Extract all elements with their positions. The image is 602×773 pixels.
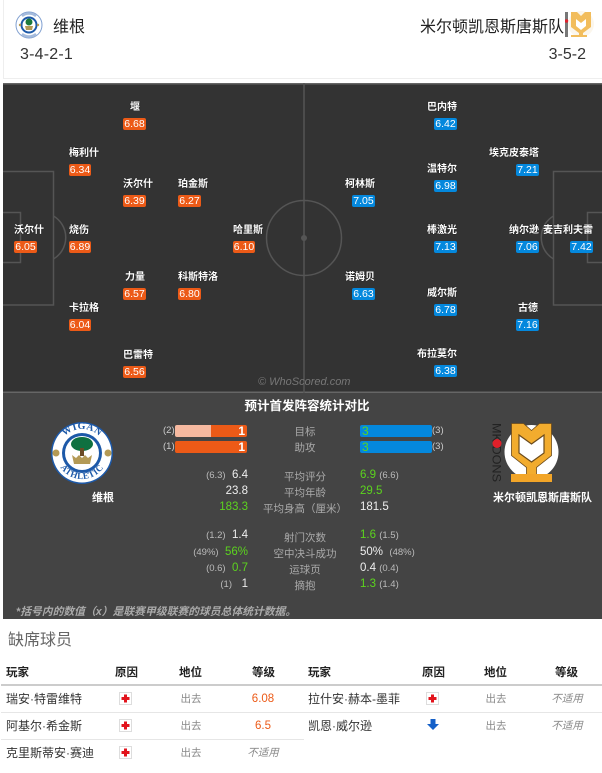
- away player: 古德: 7.16: [517, 319, 538, 331]
- home player: 珀金斯: 6.27: [179, 195, 200, 207]
- row: 凯恩·威尔逊: 不适用: [551, 720, 583, 732]
- away player: 温特尔: [427, 163, 457, 192]
- home player: 科斯特洛: 科斯特洛: [178, 272, 218, 283]
- row: 克里斯蒂安·赛迪: 不适用: [247, 747, 279, 759]
- home player: 巴雷特: 巴雷特: [123, 350, 153, 361]
- home player: 科斯特洛: [178, 271, 218, 300]
- bar: assists away: 3: [362, 440, 369, 454]
- home player: 沃尔什 goalkeeper: [14, 224, 44, 253]
- stat: average rating: (6.3) 6.4: [206, 469, 248, 481]
- bar: goals away: 3: [362, 424, 369, 438]
- label: average rating: 平均评分: [284, 471, 326, 483]
- stat: aerial duels: (49%) 56%: [193, 546, 248, 558]
- icon: down arrow: [427, 719, 439, 731]
- home player: 烧伤: 6.89: [70, 241, 90, 253]
- away player: 古德: [516, 302, 539, 331]
- row: 阿基尔·希金斯: [0, 719, 302, 733]
- away table header: 原因: [422, 667, 445, 679]
- bar: goals home: (2): [163, 425, 175, 436]
- bar: assists away: (3): [432, 441, 444, 452]
- icon: injury: [119, 719, 132, 732]
- home table header: [0, 660, 302, 680]
- row: 克里斯蒂安·赛迪: [0, 746, 302, 760]
- bar: assists home: [163, 440, 247, 454]
- away player: 棒激光: 棒激光: [427, 225, 457, 236]
- row: 克里斯蒂安·赛迪: 克里斯蒂安·赛迪: [6, 746, 94, 760]
- away table header: 地位: [484, 667, 507, 679]
- away table header: 等级: [555, 667, 578, 679]
- home player: 哈里斯: [233, 224, 263, 253]
- home player: 珀金斯: [178, 178, 208, 207]
- stat: tackles: (1) 1: [220, 578, 248, 590]
- row: 拉什安·赫本-墨菲: 拉什安·赫本-墨菲: [308, 692, 400, 706]
- stat: average height away: 181.5: [360, 501, 389, 513]
- icon: Wigan Athletic crest: ATHLETIC: [60, 464, 103, 480]
- away player: 纳尔逊: [509, 224, 539, 253]
- away player: 温特尔: 温特尔: [427, 164, 457, 175]
- row: 拉什安·赫本-墨菲: 出去: [486, 693, 506, 705]
- away player: 棒激光: [427, 224, 457, 253]
- stats heading: 预计首发阵容统计对比: [244, 399, 370, 413]
- icon: injury: [426, 692, 439, 705]
- away formation: 3-5-2: [549, 46, 586, 63]
- away player: 诺姆贝: 6.63: [353, 288, 374, 300]
- icon: injury: [119, 746, 132, 759]
- table: missing players: [0, 660, 602, 766]
- panel: pitch: [3, 83, 602, 393]
- home player: 堰: 6.68: [124, 118, 145, 130]
- home player: 巴雷特: [123, 349, 153, 378]
- away player: 威尔斯: 6.78: [435, 304, 456, 316]
- row: 拉什安·赫本-墨菲: 不适用: [551, 693, 583, 705]
- away table header: 玩家: [308, 667, 331, 679]
- stat: dribbles: (0.6) 0.7: [206, 562, 248, 574]
- row: 凯恩·威尔逊: 凯恩·威尔逊: [308, 719, 372, 733]
- row: 阿基尔·希金斯: 阿基尔·希金斯: [6, 719, 82, 733]
- home player: 梅利什: 梅利什: [69, 148, 99, 159]
- home player: 烧伤: [69, 224, 91, 253]
- row: 瑞安·特雷维特: [0, 692, 302, 706]
- bar: goals home: 1: [238, 424, 245, 438]
- home player: 梅利什: [69, 146, 99, 176]
- stat: dribbles away: 0.4 (0.4): [360, 562, 399, 574]
- home table header: 地位: [179, 667, 202, 679]
- home player: 梅利什: 6.34: [70, 164, 90, 176]
- icon: MK Dons small crest: [565, 11, 594, 37]
- home player: 沃尔什: [123, 178, 153, 207]
- icon: Wigan small crest: [16, 12, 42, 38]
- away table header: [302, 660, 602, 680]
- home player: 哈里斯: 6.10: [234, 241, 254, 253]
- away player: 巴内特: [427, 101, 457, 130]
- home table header: 玩家: [6, 667, 29, 679]
- away player: 诺姆贝: [345, 270, 375, 300]
- stat: average age: 23.8: [226, 485, 248, 497]
- away player: 诺姆贝: 诺姆贝: [345, 272, 375, 283]
- label: assists: 助攻: [294, 442, 316, 454]
- away player: 麦吉利夫雷: [543, 224, 593, 253]
- home player: 烧伤: 烧伤: [69, 225, 89, 236]
- away player: 麦吉利夫雷: 麦吉利夫雷: [543, 225, 593, 236]
- away player: 柯林斯: 7.05: [353, 195, 374, 207]
- bar: goals home: [163, 424, 247, 438]
- home player: 卡拉格: 卡拉格: [69, 303, 99, 314]
- label: average height: 平均身高（厘米）: [263, 503, 347, 515]
- home player: 沃尔什: 6.39: [124, 195, 145, 207]
- away player: 纳尔逊: 纳尔逊: [509, 225, 539, 236]
- away player: 布拉莫尔: 6.38: [435, 365, 456, 377]
- home player: 力量: 力量: [125, 272, 145, 283]
- stat: shots: (1.2) 1.4: [206, 529, 248, 541]
- away player: 巴内特: 巴内特: [427, 102, 457, 113]
- away player: 埃克皮泰塔: 埃克皮泰塔: [489, 148, 539, 159]
- away player: 布拉莫尔: 布拉莫尔: [417, 349, 457, 360]
- label: dribbles: 运球页: [289, 564, 321, 576]
- home player: 巴雷特: 6.56: [124, 366, 145, 378]
- away player: 布拉莫尔: [417, 348, 457, 377]
- icon: Wigan Athletic crest: [51, 422, 113, 484]
- stat: average rating away: 6.9 (6.6): [360, 469, 399, 481]
- row: 克里斯蒂安·赛迪: 出去: [180, 747, 202, 759]
- home player: 力量: 6.57: [124, 288, 145, 300]
- bar: goals away: [360, 424, 444, 438]
- stat: average age away: 29.5: [360, 485, 382, 497]
- label: tackles: 摘抱: [294, 580, 316, 592]
- home player: 哈里斯: 哈里斯: [233, 225, 263, 236]
- home player: 珀金斯: 珀金斯: [178, 179, 208, 190]
- home player: 沃尔什: 沃尔什: [123, 179, 153, 190]
- label: goals: 目标: [294, 426, 316, 438]
- home table header: 原因: [115, 667, 138, 679]
- row: 阿基尔·希金斯: 出去: [180, 720, 202, 732]
- label: shots: 射门次数: [284, 532, 326, 544]
- watermark: © WhoScored.com: [258, 376, 350, 388]
- home table header: 等级: [252, 667, 275, 679]
- away player: 威尔斯: 威尔斯: [427, 288, 457, 299]
- icon: MK Dons crest: [490, 422, 560, 484]
- bar: goals away: (3): [432, 425, 444, 436]
- label: aerial duels: 空中决斗成功: [274, 548, 336, 560]
- heading: missing players: 缺席球员: [8, 632, 72, 649]
- row: 瑞安·特雷维特: 瑞安·特雷维特: [6, 692, 82, 706]
- row: 拉什安·赫本-墨菲: [302, 692, 602, 706]
- away player: 温特尔: 6.98: [435, 180, 456, 192]
- home player: 科斯特洛: 6.80: [179, 288, 200, 300]
- header: match teams: [3, 0, 602, 79]
- icon: injury: [119, 692, 132, 705]
- away player: 埃克皮泰塔: 7.21: [517, 164, 538, 176]
- bar: assists home: (1): [163, 441, 175, 452]
- away team name: 米尔顿凯恩斯唐斯队: [420, 19, 564, 36]
- home player: 力量: [123, 270, 146, 300]
- home player: 堰: [123, 101, 146, 130]
- stat: aerial duels away: 50% (48%): [360, 546, 415, 558]
- home team name: 维根: [53, 19, 85, 36]
- row: 阿基尔·希金斯: 6.5: [255, 720, 271, 732]
- stat: shots away: 1.6 (1.5): [360, 529, 399, 541]
- away player: 柯林斯: 柯林斯: [345, 179, 375, 190]
- home player: 卡拉格: [69, 302, 99, 331]
- home player: 堰: 堰: [130, 102, 140, 113]
- away player: 威尔斯: [427, 286, 457, 316]
- label: average age: 平均年龄: [284, 487, 326, 499]
- away player: 埃克皮泰塔: [489, 146, 539, 176]
- home team label: 维根: [92, 492, 114, 504]
- pitch markings: [3, 83, 602, 393]
- away player: 麦吉利夫雷: 7.42: [571, 241, 592, 253]
- bar: assists away: [360, 440, 444, 454]
- stat: average height: 183.3: [219, 501, 248, 513]
- home player: 沃尔什 goalkeeper: 6.05: [15, 241, 36, 253]
- row: 凯恩·威尔逊: 出去: [486, 720, 506, 732]
- away team label: 米尔顿凯恩斯唐斯队: [493, 492, 592, 504]
- away player: 纳尔逊: 7.06: [517, 241, 538, 253]
- home player: 沃尔什 goalkeeper: 沃尔什: [14, 225, 44, 236]
- row: 凯恩·威尔逊: [302, 719, 602, 733]
- home player: 卡拉格: 6.04: [70, 319, 90, 331]
- footnote: *括号内的数值（x）是联赛甲级联赛的球员总体统计数据。: [16, 606, 296, 618]
- home formation: 3-4-2-1: [20, 46, 73, 63]
- row: 瑞安·特雷维特: 6.08: [252, 693, 274, 705]
- row: 瑞安·特雷维特: 出去: [180, 693, 202, 705]
- away player: 巴内特: 6.42: [435, 118, 456, 130]
- away player: 柯林斯: [345, 178, 375, 207]
- away player: 古德: 古德: [518, 303, 538, 314]
- panel: lineup stats comparison: [3, 393, 602, 619]
- bar: assists home: 1: [238, 440, 245, 454]
- stat: tackles away: 1.3 (1.4): [360, 578, 399, 590]
- away player: 棒激光: 7.13: [435, 241, 456, 253]
